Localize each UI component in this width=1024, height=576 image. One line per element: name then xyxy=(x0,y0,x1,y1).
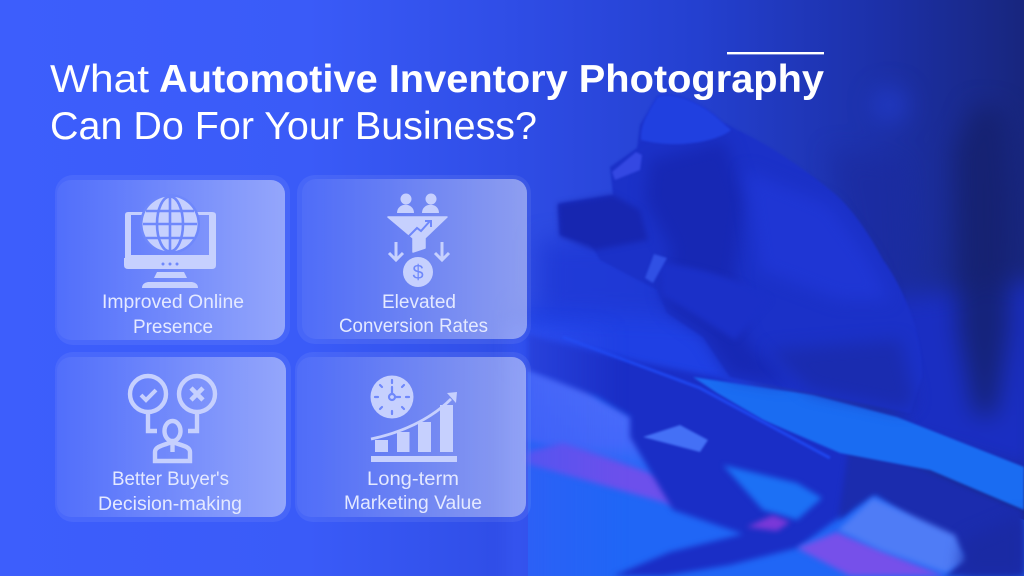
title: Automotive Inventory Photography xyxy=(159,58,824,101)
dark bottom-right corner xyxy=(960,515,1024,576)
label: Marketing Value xyxy=(344,493,482,514)
pale car panel xyxy=(528,368,665,475)
pink stripe lower xyxy=(797,532,945,576)
label: Conversion Rates xyxy=(339,316,488,337)
camera xyxy=(558,195,648,250)
panel: long-term marketing value xyxy=(295,352,531,522)
background figures xyxy=(520,87,1024,480)
icon: globe on monitor xyxy=(124,194,216,288)
icon: sales funnel with coin xyxy=(388,194,449,287)
title accent line xyxy=(727,52,824,54)
dark ring of the wheel arc xyxy=(528,335,870,576)
label: Decision-making xyxy=(98,494,242,515)
chest shadow xyxy=(645,140,790,385)
panel: better buyer's decision-making xyxy=(55,352,291,522)
lower back shadow xyxy=(770,340,915,410)
hood highlight xyxy=(693,377,1024,510)
pink stripe left xyxy=(528,443,713,506)
forearm xyxy=(660,262,770,340)
icon: sales funnel with coin: $ xyxy=(412,262,424,284)
reflection in wheel xyxy=(643,425,708,452)
label: Improved Online xyxy=(102,292,244,313)
label: Long-term xyxy=(367,469,459,490)
label xyxy=(339,292,488,337)
photographer silhouette xyxy=(558,95,922,413)
face highlight xyxy=(612,152,642,180)
title: What xyxy=(50,58,149,101)
back highlight xyxy=(745,170,890,300)
base blue under car xyxy=(528,372,1024,576)
label xyxy=(98,469,242,515)
label: Presence xyxy=(133,317,213,338)
wristband xyxy=(645,254,667,283)
magenta spot xyxy=(747,515,790,531)
label: Better Buyer's xyxy=(112,469,229,490)
panel: elevated conversion rates xyxy=(297,175,531,344)
hat xyxy=(641,95,731,144)
dark band right of arc xyxy=(838,440,1024,576)
label xyxy=(102,292,244,338)
left fade over photo xyxy=(505,325,620,576)
icon: person choosing between check and cross xyxy=(130,376,215,461)
label xyxy=(344,469,482,514)
pale patch right xyxy=(838,498,966,573)
label: Elevated xyxy=(382,292,456,313)
thin body line xyxy=(563,337,830,458)
car scene xyxy=(528,335,1024,576)
title: Can Do For Your Business? xyxy=(50,105,537,148)
icon: clock and growth chart xyxy=(370,376,457,462)
body xyxy=(558,95,922,413)
triangle reflection xyxy=(723,465,822,520)
panel: improved online presence xyxy=(55,175,290,345)
title xyxy=(50,58,824,148)
